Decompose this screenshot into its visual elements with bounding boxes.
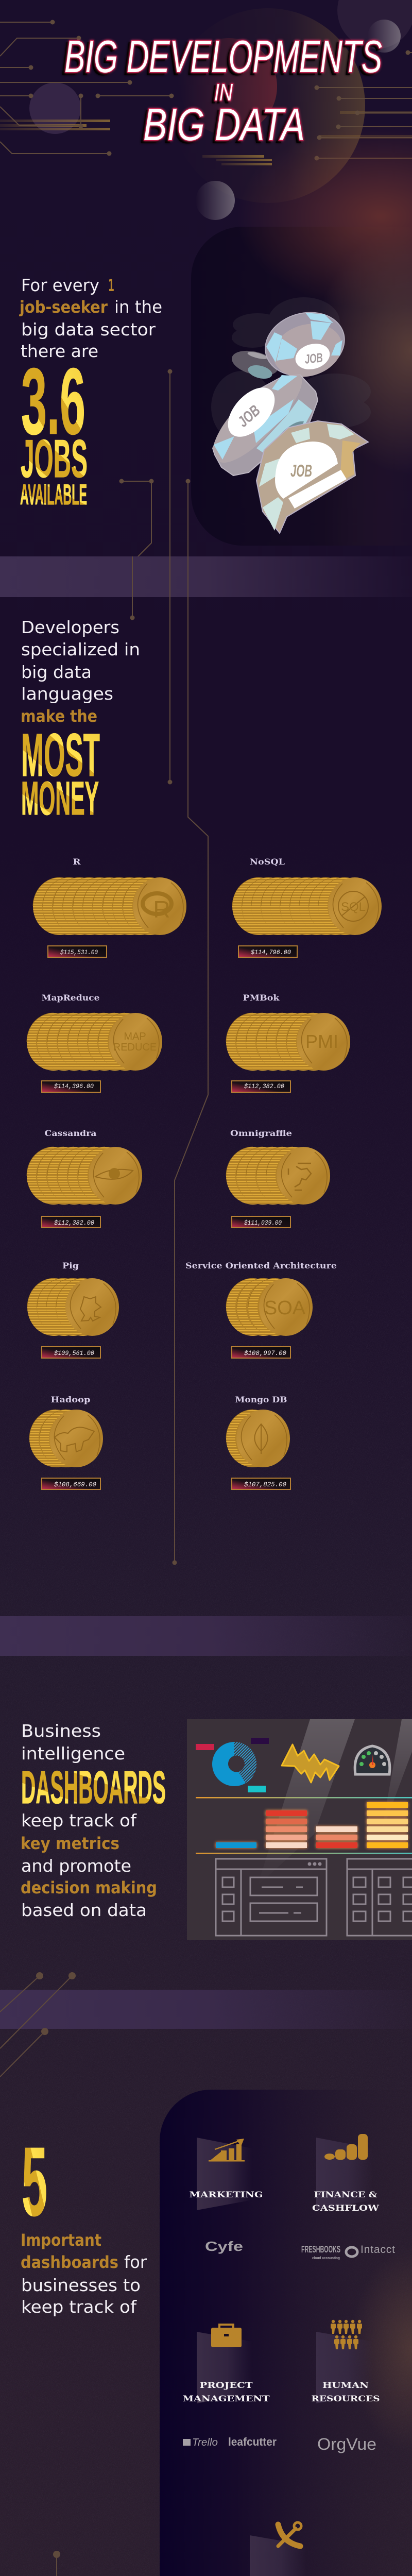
developers heading: languages	[21, 684, 113, 704]
middle chip	[213, 375, 318, 476]
item: marketing: Cyfe	[205, 2239, 243, 2254]
item: marketing: MARKETING	[190, 2190, 263, 2199]
salary item: R: R	[153, 896, 170, 923]
salary item: NoSQL	[232, 857, 382, 957]
dashboards statement: and promote	[21, 1856, 131, 1876]
salary item: Hadoop: Hadoop	[50, 1395, 91, 1404]
panel: important dashboards	[160, 2090, 412, 2576]
salary item: Omnigraffle	[226, 1128, 330, 1228]
salary item: Service Oriented Architecture	[185, 1261, 337, 1358]
item: finance and cashflow: FINANCE &	[314, 2190, 377, 2199]
mid circuit traces	[0, 1976, 412, 2576]
job seeker statement: in the	[114, 297, 162, 317]
salary item: Cassandra: $112,382.00	[54, 1219, 94, 1227]
salary item: Cassandra: Cassandra	[44, 1128, 97, 1138]
band divider 1	[0, 556, 412, 597]
infographic canvas: AVAILABLE	[20, 478, 87, 511]
icon: growth bars	[209, 2139, 245, 2162]
salary item: NoSQL: $114,796.00	[251, 948, 291, 956]
item: finance and cashflow: FRESHBOOKS	[301, 2244, 340, 2255]
salary item: Mongo DB	[226, 1395, 290, 1489]
circuit nodes	[29, 20, 410, 1565]
salary item: MapReduce: MapReduce	[41, 993, 100, 1003]
panel: dashboard illustration	[187, 1719, 412, 1940]
salary item: PMBok: PMBok	[243, 993, 280, 1003]
glowing bar stacks	[216, 1802, 408, 1848]
line chart	[282, 1744, 339, 1783]
item: marketing	[190, 2139, 263, 2254]
salary item: Hadoop	[29, 1395, 103, 1489]
five dashboards statement: dashboards	[21, 2252, 118, 2272]
salary item: NoSQL: SQL	[341, 900, 366, 914]
item: human resources: RESOURCES	[311, 2394, 380, 2403]
job seeker statement: job-seeker	[19, 297, 108, 317]
dashboards statement: based on data	[21, 1900, 147, 1920]
infographic canvas: JOBS	[21, 429, 88, 489]
developers heading: big data	[21, 662, 92, 682]
item: project management: PROJECT	[200, 2380, 253, 2390]
dashboards statement: key metrics	[21, 1834, 119, 1853]
dashboards statement: keep track of	[21, 1810, 137, 1831]
salary item: MapReduce	[27, 993, 162, 1092]
developers heading: MONEY	[21, 772, 99, 825]
mid circuit nodes	[6, 1972, 410, 2576]
header circuit traces	[0, 22, 412, 1563]
donut chart	[196, 1738, 269, 1792]
salary item: Mongo DB: Mongo DB	[235, 1395, 287, 1404]
job seeker statement: there are	[21, 341, 98, 361]
job seeker statement: big data sector	[21, 319, 156, 340]
redraw of traces over the band	[132, 556, 188, 817]
salary item: R: $115,531.00	[60, 948, 98, 956]
item: human resources	[311, 2320, 380, 2453]
item: finance and cashflow	[301, 2134, 395, 2260]
band divider 2	[0, 1616, 412, 1656]
five dashboards statement: for	[124, 2252, 147, 2272]
dashboards statement: decision making	[21, 1878, 157, 1897]
icon: people	[331, 2320, 362, 2349]
salary item: Pig: $109,561.00	[54, 1349, 94, 1357]
five dashboards statement: keep track of	[21, 2297, 137, 2317]
salary item: Pig: Pig	[62, 1261, 79, 1270]
title: BIG DATA	[143, 99, 305, 150]
infographic canvas: DASHBOARDS	[21, 1762, 166, 1814]
salary item: NoSQL: NoSQL	[250, 857, 285, 867]
dashboards statement: intelligence	[21, 1743, 125, 1764]
paper grain overlay	[0, 1275, 412, 2574]
icon: coin stacks	[324, 2134, 368, 2160]
salary item: MapReduce: $114,396.00	[54, 1082, 94, 1090]
five dashboards statement: businesses to	[21, 2275, 141, 2295]
item: human resources: HUMAN	[322, 2380, 369, 2390]
item: project management	[182, 2325, 277, 2448]
salary item: Pig	[27, 1261, 119, 1358]
developers heading: specialized in	[21, 639, 140, 659]
salary item: Service Oriented Architecture: $108,997.00	[244, 1349, 286, 1357]
title	[64, 31, 382, 150]
item: finance and cashflow: cloud accounting	[312, 2257, 340, 2260]
title: IN	[214, 79, 233, 106]
developers heading	[21, 617, 140, 825]
broken front chip	[256, 421, 368, 533]
five dashboards statement: Important	[21, 2230, 101, 2250]
developers heading: Developers	[21, 617, 119, 637]
small distant chip	[229, 347, 281, 381]
header cosmic backdrop: planets and glows	[0, 0, 412, 220]
salary item: Service Oriented Architecture: Service Oriented Architecture	[185, 1261, 337, 1270]
top chip	[258, 303, 352, 385]
stat: 3.6 jobs available	[20, 348, 88, 511]
salary item: Hadoop: $108,669.00	[54, 1481, 96, 1488]
salary item: R	[33, 857, 186, 957]
item: customer support	[250, 2522, 324, 2576]
item: finance and cashflow: Intacct	[360, 2244, 395, 2256]
job seeker statement: 1	[108, 276, 114, 295]
item: finance and cashflow: CASHFLOW	[312, 2203, 380, 2213]
five dashboards statement: 5	[22, 2127, 47, 2236]
developers heading: MOST	[21, 721, 100, 789]
top chip: JOB	[304, 350, 323, 367]
illustration: falling job chips	[211, 297, 371, 533]
window wireframes	[216, 1859, 412, 1936]
salary item: Omnigraffle: Omnigraffle	[230, 1128, 292, 1138]
item: project management: MANAGEMENT	[182, 2394, 270, 2403]
item: project management: Trello	[192, 2437, 218, 2448]
dashboards statement: Business	[21, 1721, 101, 1741]
stat: 3.6 jobs available: 3.6	[21, 348, 85, 454]
middle chip: JOB	[235, 402, 264, 431]
salary item: Mongo DB: $107,825.00	[244, 1481, 286, 1488]
salary item: Omnigraffle: $111,039.00	[244, 1219, 282, 1227]
item: project management: leafcutter	[228, 2435, 277, 2448]
icon: briefcase	[211, 2325, 242, 2347]
salary item: MapReduce: MAP	[124, 1031, 146, 1042]
salary item: PMBok	[226, 993, 350, 1092]
salary item: PMBok: $112,382.00	[244, 1082, 284, 1090]
warm glows over the right edge	[237, 124, 412, 474]
five dashboards statement	[21, 2127, 147, 2317]
salary item: PMBok: PMI	[305, 1031, 338, 1052]
gauge	[355, 1746, 390, 1774]
job seeker statement: For every	[21, 275, 99, 295]
salary item: Service Oriented Architecture: SOA	[264, 1297, 306, 1319]
salary item: MapReduce: REDUCE	[113, 1042, 157, 1053]
salary item: Cassandra	[27, 1128, 142, 1228]
broken front chip: JOB	[290, 461, 312, 480]
developers heading: make the	[21, 706, 97, 726]
band divider 3	[0, 1990, 412, 2029]
icon: phone and wrench	[278, 2522, 301, 2546]
rules	[196, 1797, 412, 1798]
salary item: R: R	[73, 857, 81, 867]
dashboards statement	[21, 1721, 166, 1920]
job seeker statement	[19, 275, 162, 361]
item: human resources: OrgVue	[317, 2435, 376, 2453]
panel: job chips backdrop	[191, 227, 412, 546]
